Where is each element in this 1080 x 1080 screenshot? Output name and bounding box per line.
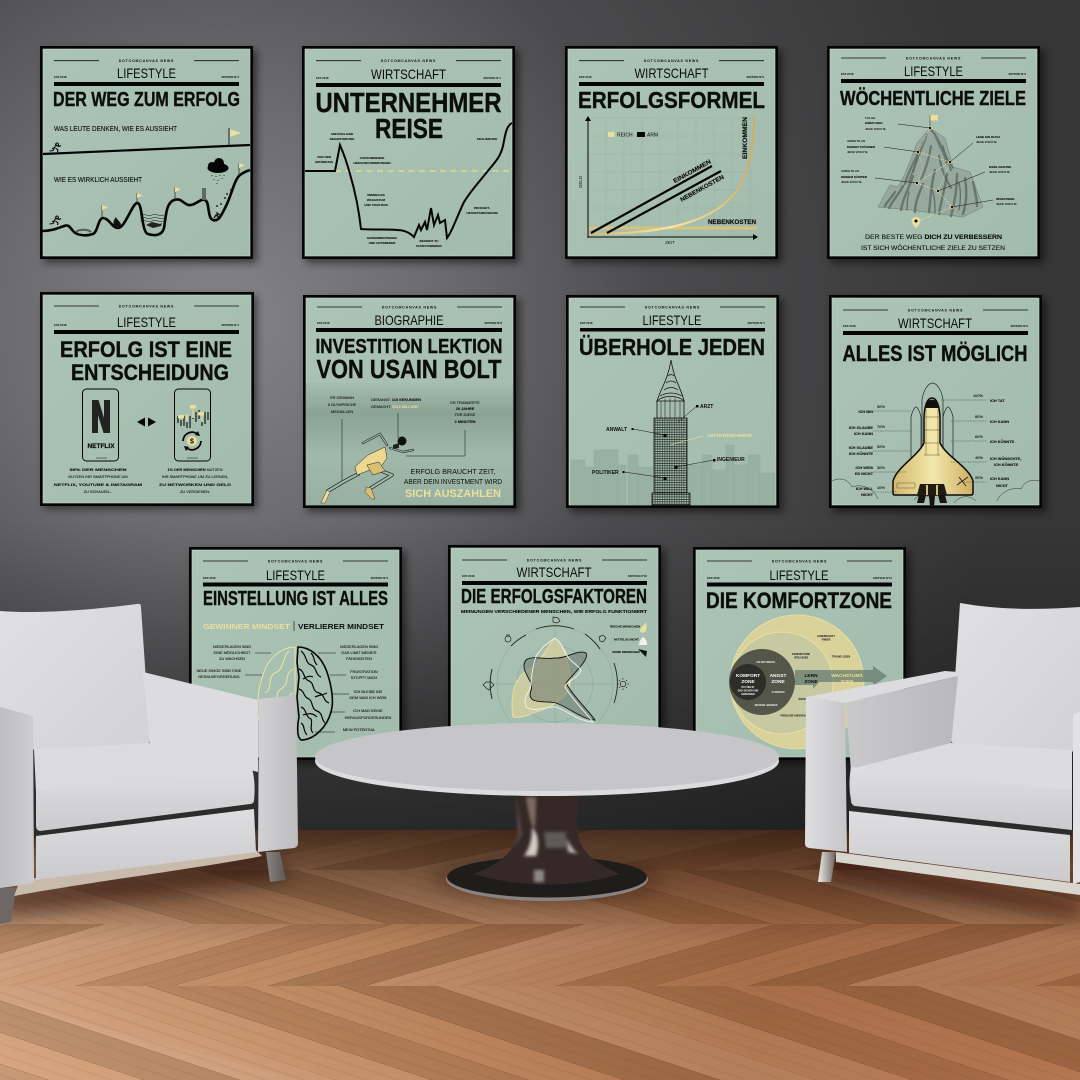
percent ladder: left: ICH GLAUBE — [849, 425, 873, 430]
poster header — [54, 304, 239, 334]
poster header — [707, 559, 892, 586]
line chart: money over time: NEBENKOSTEN — [680, 175, 725, 204]
title: DIE KOMFORTZONE — [706, 588, 892, 613]
caption: 1 percent — [159, 467, 231, 494]
weekly goal labels: EINEN WEG — [865, 121, 883, 125]
mindset headings — [203, 621, 385, 631]
percent ladder: left: ICH WILL — [856, 486, 874, 491]
line chart: money over time: ARM — [647, 132, 658, 138]
percent ladder: left — [849, 404, 911, 497]
poster header: LIFESTYLE — [642, 312, 702, 328]
fact labels and connectors — [328, 395, 480, 485]
percent ladder: left: 30% — [877, 465, 885, 470]
poster header: DOTCOMCANVAS NEWS — [119, 304, 174, 308]
weekly goal labels: JEDE WOCHE — [847, 150, 868, 154]
line chart: money over time: ZEIT — [665, 240, 675, 245]
poster header: EST.2018 — [707, 576, 720, 580]
journey stage labels: UND OPTIMIEREN — [369, 241, 396, 245]
weekly goal labels: LESE EIN BUCH — [976, 135, 1001, 139]
percent ladder: left: NICHT — [861, 492, 874, 497]
poster header: DOTCOMCANVAS NEWS — [906, 56, 961, 60]
journey stage labels: FUNKTIONIEREN — [416, 244, 442, 248]
poster: Investition Lektion von Usain Bolt — [303, 295, 520, 512]
zone labels: KOMFORT — [736, 673, 760, 679]
title: ENTSCHEIDUNG — [71, 360, 229, 385]
weekly goal labels: INVESTIERE — [996, 197, 1014, 201]
armchair left — [0, 604, 298, 924]
table top — [315, 723, 779, 791]
zone labels: AUSREDEN — [772, 691, 785, 694]
journey stage labels: PRODUKT- — [474, 206, 490, 210]
weekly goal labels: FOLGE — [865, 116, 876, 120]
zone labels: LERN — [804, 673, 818, 679]
poster header: EST.2018 — [843, 324, 856, 328]
closing statement: ERFOLG BRAUCHT ZEIT, — [411, 467, 495, 476]
brain: winner half — [258, 647, 295, 740]
zone labels: ANGST — [770, 673, 786, 679]
arm inner face — [846, 676, 958, 772]
poster header: EDITION N°10 — [628, 574, 647, 578]
poster header: EST.2018 — [54, 323, 67, 327]
poster: Erfolgsformel — [565, 46, 782, 263]
title: ALLES IST MÖGLICH — [842, 341, 1028, 366]
seam backing — [849, 790, 1072, 836]
percent ladder: right: 80% — [975, 414, 983, 419]
title: DER WEG ZUM ERFOLG — [53, 89, 240, 111]
journey stage labels: EXPERIMENTIEREN — [367, 236, 398, 240]
line chart: money over time: EINKOMMEN — [743, 117, 749, 159]
mindset labels and pointers: MEIN POTENTIAL — [343, 727, 376, 732]
fact labels and connectors: 20 JAHRE — [456, 406, 475, 411]
seat frame — [36, 809, 256, 880]
poster header: WIRTSCHAFT — [516, 564, 592, 580]
career labels: ARZT — [700, 404, 713, 410]
poster header — [579, 59, 764, 86]
percent ladder: left: ICH GLAUBE — [849, 445, 873, 450]
poster header: EST.2018 — [580, 321, 593, 325]
weekly goal labels: JEDE WOCHE — [989, 170, 1010, 174]
subtitle: MEINUNGEN VERSCHIEDENER MENSCHEN, WIE ERFOLG FUNKTIONIERT — [461, 609, 647, 614]
poster header: BIOGRAPHIE — [374, 312, 444, 328]
title: DIE ERFOLGSFAKTOREN — [461, 586, 647, 608]
mindset headings: GEWINNER MINDSET — [203, 624, 291, 631]
weekly goal labels: JEDE WOCHE — [841, 180, 862, 184]
base rim — [446, 857, 648, 901]
zone labels: DU FÜHLST — [741, 686, 755, 689]
back cushion — [951, 603, 1080, 752]
near arm — [0, 707, 34, 888]
wooden herringbone floor — [0, 830, 1080, 1080]
percent ladder: right — [941, 393, 1021, 488]
floor shadows — [0, 848, 1080, 918]
poster header: LIFESTYLE — [770, 567, 828, 583]
mindset labels and pointers: DEM WAS ICH WEIß — [349, 695, 387, 700]
zone labels: FINDEN — [822, 640, 831, 642]
poster: Unternehmer Reise — [302, 46, 519, 263]
percent ladder: left: 90% — [877, 404, 885, 409]
poster header: LIFESTYLE — [266, 567, 325, 583]
poster header: DOTCOMCANVAS NEWS — [644, 59, 699, 63]
poster header: DOTCOMCANVAS NEWS — [908, 308, 963, 312]
caption: 99 percent: NETFLIX, YOUTUBE & INSTAGRAM — [54, 482, 142, 487]
fact labels and connectors: ER GEWANN — [330, 395, 354, 400]
poster header: DOTCOMCANVAS NEWS — [268, 559, 323, 563]
seat cushion front — [36, 769, 255, 831]
journey stage labels: / MARKTANPASSUNG — [466, 211, 499, 215]
percent ladder: left: ICH KANN — [854, 431, 873, 436]
career labels: UNTERNEHMER — [707, 433, 753, 439]
poster header: EDITION N°3 — [1009, 72, 1026, 76]
fact labels and connectors: 2 MINUTEN — [455, 419, 476, 424]
percent ladder: right: ICH KÖNNTE — [990, 439, 1015, 444]
weekly goal labels: JEDE WOCHE — [976, 140, 997, 144]
caption: 99 percent: 99% DER MENSCHEN — [70, 467, 127, 472]
journey stage labels: WACHSTUM — [367, 198, 386, 202]
poster header: EST.2018 — [841, 72, 854, 76]
poster header: EDITION N°3 — [222, 75, 239, 79]
journey stage labels: HERAUSFORDERUNGEN — [353, 161, 391, 165]
caption: 1 percent: ZU NETWORKEN UND GELD — [159, 482, 231, 487]
percent ladder: left: 70% — [877, 424, 885, 429]
zone labels: ZONE — [771, 679, 785, 685]
fact labels and connectors: ER TRAINIERTE — [450, 400, 480, 405]
percent ladder: right: ICH TAT — [990, 398, 1005, 403]
poster header: EDITION N°1 — [484, 76, 501, 80]
poster header: LIFESTYLE — [117, 65, 176, 81]
poster header: WIRTSCHAFT — [898, 315, 972, 331]
mindset labels and pointers: NEUE DINGE SIND EINE — [197, 668, 242, 673]
title: ÜBERHOLE JEDEN — [579, 334, 765, 360]
percent ladder: left: ICH WEIß — [855, 465, 874, 470]
poster: Erfolg ist eine Entscheidung — [40, 292, 257, 509]
zone labels: ZONE — [804, 679, 818, 685]
line chart: money over time: REICH — [617, 132, 633, 138]
fact labels and connectors: GEMACHT: $119 MILLION — [371, 404, 418, 409]
journey stage labels: SKALIERUNG — [477, 137, 498, 141]
mindset labels and pointers: NIEDERLAGEN SIND — [213, 644, 251, 649]
caption: 1 percent: ZU VERDIENEN. — [180, 489, 210, 494]
journey stage labels: VOR DER — [317, 155, 332, 159]
poster header: WIRTSCHAFT — [371, 66, 446, 82]
poster header: DOTCOMCANVAS NEWS — [645, 305, 700, 309]
title: REISE — [375, 113, 443, 144]
zone labels: GEBORGEN — [741, 694, 755, 696]
career labels: INGENIEUR — [717, 457, 745, 463]
radar category icons — [483, 617, 629, 690]
caption: 1 percent: 1% DER MENSCHEN NUTZEN — [167, 467, 223, 472]
caption: reality: WIE ES WIRKLICH AUSSIEHT — [54, 177, 143, 184]
journey stage labels: BEGEISTERUNG — [330, 137, 355, 141]
weekly goal labels: DEINEN TRÄUMEN — [847, 145, 876, 149]
seat cushion top — [851, 743, 1072, 792]
caption: 99 percent — [54, 467, 142, 494]
base trim — [836, 852, 1080, 895]
closing statement — [404, 467, 502, 500]
weekly goal labels: ESSE GESUND — [989, 165, 1012, 169]
caption: expectation: WAS LEUTE DENKEN, WIE ES AUSSIEHT — [54, 126, 178, 133]
poster header: LIFESTYLE — [117, 314, 176, 330]
title: ERFOLG IST EINE — [60, 337, 232, 362]
poster header: DOTCOMCANVAS NEWS — [381, 59, 436, 63]
seam backing — [34, 784, 254, 838]
percent ladder: right: NICHT — [996, 483, 1009, 488]
weekly goal labels: ARBEITE AN — [841, 169, 859, 173]
closing statement: ABER DEIN INVESTMENT WIRD — [404, 477, 502, 486]
mindset labels and pointers: DAS LIMIT MEINER — [341, 650, 377, 655]
city skyline — [571, 445, 775, 505]
skyscraper — [652, 360, 690, 505]
seat cushion front — [850, 767, 1072, 830]
weekly goal labels: DEINEM KÖRPER — [841, 175, 868, 179]
zone labels: TRÄUME LEBEN — [832, 656, 850, 658]
poster header: EST.2018 — [462, 574, 475, 578]
line chart: money over time: EINKOMMEN — [673, 159, 712, 185]
mindset labels and pointers: FRUSTRATION — [350, 669, 378, 674]
chair leg — [818, 852, 836, 882]
chair legs — [0, 852, 286, 924]
poster header: EDITION N°6 — [747, 75, 764, 79]
zone labels: LEIDENSCHAFT — [817, 635, 835, 638]
poster header — [580, 305, 765, 332]
comparison arrows — [137, 418, 156, 426]
poster header: EDITION N°7 — [748, 321, 765, 325]
mindset labels and pointers — [197, 644, 392, 732]
zone labels: WEITER — [799, 699, 808, 701]
poster header: EST.2018 — [54, 75, 67, 79]
poster header: EDITION N°8 — [485, 321, 502, 325]
arm front — [805, 697, 847, 852]
closing statement: IST SICH WÖCHENTLICHE ZIELE ZU SETZEN — [861, 244, 1005, 252]
poster header: EST.2018 — [203, 576, 216, 580]
closing statement — [861, 234, 1005, 252]
percent ladder: left: 50% — [877, 444, 885, 449]
poster header: DOTCOMCANVAS NEWS — [772, 559, 827, 563]
caption: 1 percent: IHR SMARTPHONE UM ZU LERNEN, — [162, 474, 228, 479]
poster header — [462, 558, 647, 585]
line chart: money over time — [578, 116, 758, 245]
weekly goal labels — [841, 116, 1017, 206]
journey stage labels: BEGINNT ZU — [420, 239, 439, 243]
title: WÖCHENTLICHE ZIELE — [840, 87, 1026, 110]
poster: Die Komfortzone — [693, 547, 910, 764]
zone labels: ZONE — [741, 679, 755, 685]
poster header — [316, 59, 501, 87]
mindset labels and pointers: ICH BLEIBE BEI — [354, 689, 382, 694]
title — [60, 337, 232, 385]
title: INVESTITION LEKTION — [316, 335, 502, 358]
dashed break-even line — [335, 170, 512, 172]
title — [316, 335, 502, 384]
armchair right — [805, 603, 1080, 895]
zone labels: DICH SICHER UND — [738, 690, 759, 692]
zone labels — [736, 635, 864, 718]
percent ladder: right: ICH KÖNNTE — [994, 462, 1019, 467]
poster: Der Weg zum Erfolg — [40, 46, 257, 263]
poster header: EDITION N°6 — [1011, 324, 1028, 328]
percent ladder: left: ICH BIN — [859, 409, 873, 414]
mountain with goal route — [875, 115, 993, 228]
zone labels: SELBSTZWEIFEL — [756, 662, 776, 664]
percent ladder: right: ICH KANN — [990, 476, 1009, 481]
mindset labels and pointers: ZU WACHSEN — [219, 656, 245, 661]
zone circles — [729, 615, 887, 749]
expectation line with flag and runner — [43, 128, 250, 154]
seat frame — [849, 811, 1070, 882]
fact labels and connectors: GERANNT: 115 SEKUNDEN — [371, 397, 421, 402]
percent ladder: left: ICH KÖNNTE — [849, 451, 873, 456]
reality path with obstacles — [42, 158, 250, 235]
mindset labels and pointers: FÄHIGKEITEN — [346, 656, 372, 661]
brain: loser half — [297, 647, 332, 740]
far arm — [1073, 712, 1080, 884]
coffee table — [315, 723, 779, 901]
line chart: money over time: GELD — [578, 175, 583, 188]
percent ladder: right: ICH WÜNSCHTE, — [990, 456, 1021, 461]
poster header — [843, 308, 1028, 335]
poster: Wöchentliche Ziele — [827, 46, 1044, 263]
base plate — [447, 856, 647, 898]
radar legend: REICHE MENSCHEN — [610, 624, 641, 628]
stadium backdrop — [306, 383, 513, 505]
arm inner face — [143, 672, 258, 772]
poster header: EDITION N°9 — [371, 576, 388, 580]
arm front — [258, 695, 298, 852]
weekly goal labels: JEDE WOCHE — [996, 202, 1017, 206]
poster header — [203, 559, 388, 586]
poster header: DOTCOMCANVAS NEWS — [382, 305, 437, 309]
journey stage labels: ANFÄNGLICHE — [331, 132, 353, 136]
poster header: EST.2018 — [317, 321, 330, 325]
career labels — [592, 404, 753, 480]
sprinter illustration — [321, 434, 413, 503]
journey stage labels: GRÜNDUNG — [315, 160, 334, 164]
journey stage labels: MINIMALES — [367, 193, 385, 197]
caption: 99 percent: NUTZEN IHR SMARTPHONE UM — [68, 474, 128, 479]
title — [316, 87, 502, 144]
poster header: WIRTSCHAFT — [634, 65, 709, 81]
clouds — [832, 479, 1039, 504]
title: EINSTELLUNG IST ALLES — [203, 588, 388, 610]
poster: Überhole jeden — [566, 295, 783, 512]
poster header: DOTCOMCANVAS NEWS — [527, 558, 582, 562]
percent ladder: right: 60% — [975, 434, 983, 439]
table edge — [315, 726, 779, 796]
fact labels and connectors: FÜR DIESE — [455, 412, 476, 417]
weekly goal labels: ARBEITE AN — [847, 139, 865, 143]
career labels: POLITIKER — [592, 470, 619, 476]
stem highlights — [512, 795, 578, 882]
phone: Netflix: NETFLIX — [87, 443, 115, 450]
arm top — [806, 671, 958, 703]
percent ladder: right: 100% — [973, 393, 983, 398]
radar chart — [490, 626, 617, 742]
poster header — [316, 305, 502, 332]
mindset labels and pointers: STOPPT MICH — [351, 675, 377, 680]
radar legend — [610, 622, 647, 657]
zone labels: ZONE — [840, 679, 854, 685]
percent ladder: left: 10% — [877, 485, 885, 490]
poster header: EDITION N°4 — [222, 323, 239, 327]
poster header: EST.2018 — [579, 75, 592, 79]
radar legend: MITTELSCHICHT — [614, 638, 639, 642]
poster: Alles ist möglich — [829, 295, 1046, 512]
percent ladder: right: 20% — [975, 475, 983, 480]
mindset labels and pointers: EINE MÖGLICHKEIT — [214, 650, 251, 655]
mindset labels and pointers: HERAUSFORDERUNGEN — [345, 715, 392, 720]
poster header — [841, 56, 1026, 83]
journey stage labels: AUFKOMMENDE — [360, 156, 384, 160]
caption: 99 percent: ZU SCHAUEN... — [84, 489, 112, 494]
percent ladder: left: ES NICHT — [855, 471, 874, 476]
journey curve — [305, 123, 512, 238]
line chart: money over time: NEBENKOSTEN — [708, 219, 756, 226]
closing statement: DER BESTE WEG DICH ZU VERBESSERN — [865, 234, 1002, 241]
poster header: DOTCOMCANVAS NEWS — [119, 59, 174, 63]
space shuttle — [893, 383, 973, 507]
weekly goal labels: JEDE WOCHE — [865, 127, 886, 131]
mindset labels and pointers: ICH MAG KEINE — [353, 708, 383, 713]
zone labels: MEINUNG ANDERER — [755, 704, 778, 707]
pedestal stem — [474, 795, 620, 884]
zone labels: WACHSTUMS — [831, 673, 864, 679]
phone: trading and money cycle: $ — [190, 438, 194, 446]
career labels: ANWALT — [606, 427, 627, 433]
phone: trading and money cycle — [174, 389, 210, 461]
zone labels: KOMFORTZONE — [792, 654, 810, 656]
poster: Die Erfolgsfaktoren — [448, 545, 665, 762]
phone: Netflix — [82, 389, 118, 461]
journey stage labels: UND TRAKTION — [364, 203, 389, 207]
journey stage labels — [315, 132, 499, 248]
fact labels and connectors: 9 OLYMPISCHE — [328, 402, 357, 407]
base trim — [14, 850, 262, 896]
title: VON USAIN BOLT — [316, 354, 502, 384]
wall background — [0, 0, 1080, 832]
poster header: LIFESTYLE — [904, 63, 963, 79]
seat cushion top — [34, 743, 252, 792]
mindset headings: VERLIERER MINDSET — [298, 624, 385, 631]
zone labels: PROBLEME ANGEHEN — [780, 714, 806, 718]
poster header: EST.2018 — [316, 76, 329, 80]
poster: Einstellung ist alles — [189, 547, 406, 764]
poster header — [54, 59, 239, 86]
closing statement: SICH AUSZAHLEN — [405, 488, 501, 500]
back cushion — [0, 604, 150, 750]
radar legend: ARME MENSCHEN — [612, 650, 640, 654]
fact labels and connectors: MEDAILLEN — [331, 409, 353, 414]
mindset labels and pointers: NIEDERLAGEN SIND — [340, 644, 378, 649]
title: UNTERNEHMER — [316, 87, 502, 118]
poster header: EDITION N°11 — [873, 576, 892, 580]
mindset labels and pointers: HERAUSFORDERUNG — [198, 674, 240, 679]
percent ladder: right: ICH KANN — [990, 419, 1009, 424]
percent ladder: right: 40% — [975, 455, 983, 460]
zone labels: VERLASSEN — [794, 656, 808, 660]
title: ERFOLGSFORMEL — [578, 87, 765, 113]
